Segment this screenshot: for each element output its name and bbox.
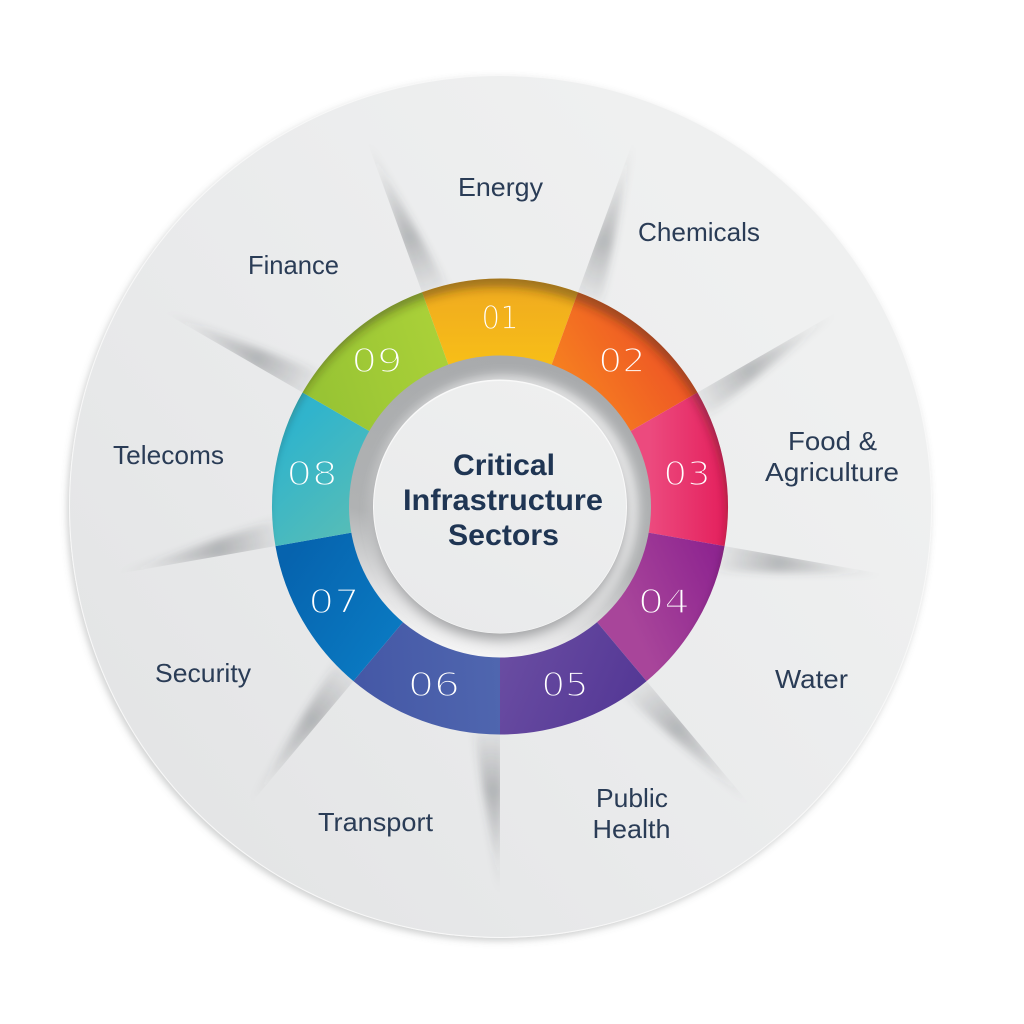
label: Food & Agriculture: Food &	[788, 426, 877, 456]
ring numbers: 01	[482, 298, 518, 337]
ring numbers: 09	[352, 341, 402, 380]
label: Security: Security	[155, 658, 251, 688]
centre circle	[373, 380, 627, 634]
label: Food & Agriculture	[765, 426, 899, 487]
ring numbers	[286, 298, 710, 704]
title: Sectors	[448, 519, 559, 552]
label: Finance: Finance	[248, 250, 339, 280]
ring numbers: 05	[542, 665, 588, 704]
label: Telecoms: Telecoms	[113, 440, 224, 470]
ring numbers: 04	[638, 582, 690, 621]
colour ring	[272, 278, 728, 734]
label: Food & Agriculture: Agriculture	[765, 457, 899, 487]
segment 09	[303, 292, 452, 436]
outer disc	[69, 75, 932, 938]
title	[403, 449, 603, 552]
segment 01	[422, 279, 578, 375]
segment 05	[500, 614, 647, 734]
label: Public Health: Health	[592, 814, 670, 844]
segment 03	[621, 392, 728, 546]
inner bevel ring	[349, 356, 651, 658]
ring numbers: 08	[286, 454, 338, 493]
segment 07	[275, 531, 410, 681]
ring numbers: 06	[408, 665, 460, 704]
label: Transport: Transport	[318, 807, 434, 837]
title: Infrastructure	[403, 484, 603, 517]
label: Chemicals: Chemicals	[638, 217, 760, 247]
ring numbers: 07	[308, 582, 360, 621]
label: Energy: Energy	[458, 172, 543, 202]
segment 02	[548, 292, 697, 436]
ring numbers: 02	[598, 341, 646, 380]
label: Water: Water	[775, 664, 848, 694]
label: Public Health	[592, 783, 670, 844]
label: Public Health: Public	[596, 783, 668, 813]
segment 04	[590, 531, 725, 681]
segment 08	[272, 392, 379, 546]
title: Critical	[453, 449, 555, 482]
ring numbers: 03	[664, 454, 710, 493]
segment 06	[353, 614, 500, 734]
